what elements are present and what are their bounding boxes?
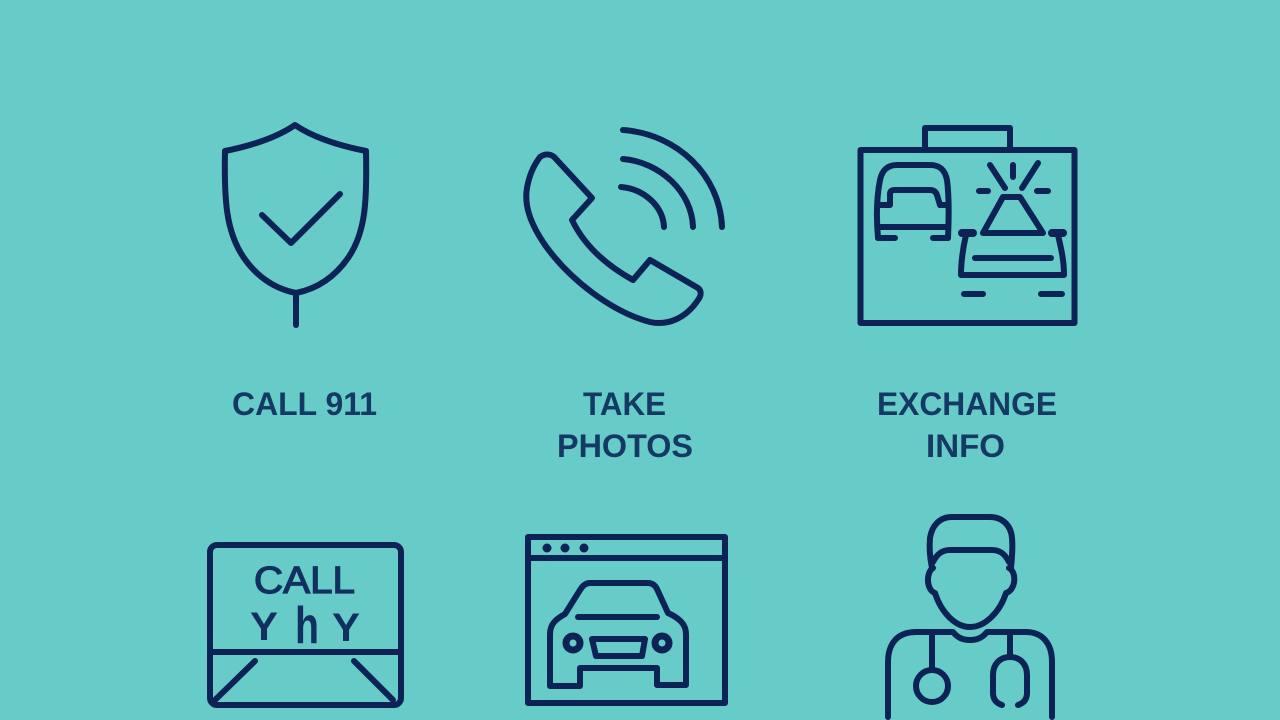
icon: call tow screen [210, 545, 401, 705]
icon: call tow screen: CALL [254, 560, 355, 602]
icon: doctor with stethoscope [888, 517, 1052, 717]
icon: briefcase with two cars in a collision [860, 128, 1074, 323]
label: exchange info: EXCHANGE [877, 386, 1057, 422]
label: take photos: PHOTOS [557, 428, 693, 464]
icon: call tow screen: Y [250, 605, 278, 649]
icon: browser window with car [528, 537, 725, 703]
label: take photos: TAKE [583, 386, 666, 422]
icon: call tow screen: h [295, 597, 319, 655]
icon: call tow screen: Y [332, 606, 360, 650]
label: take photos [557, 386, 693, 464]
icon: phone handset with signal arcs [526, 130, 722, 323]
label: exchange info [877, 386, 1057, 464]
label: exchange info: INFO [926, 428, 1005, 464]
label: call 911: CALL 911 [232, 386, 377, 422]
icon: shield with check mark [225, 125, 366, 325]
